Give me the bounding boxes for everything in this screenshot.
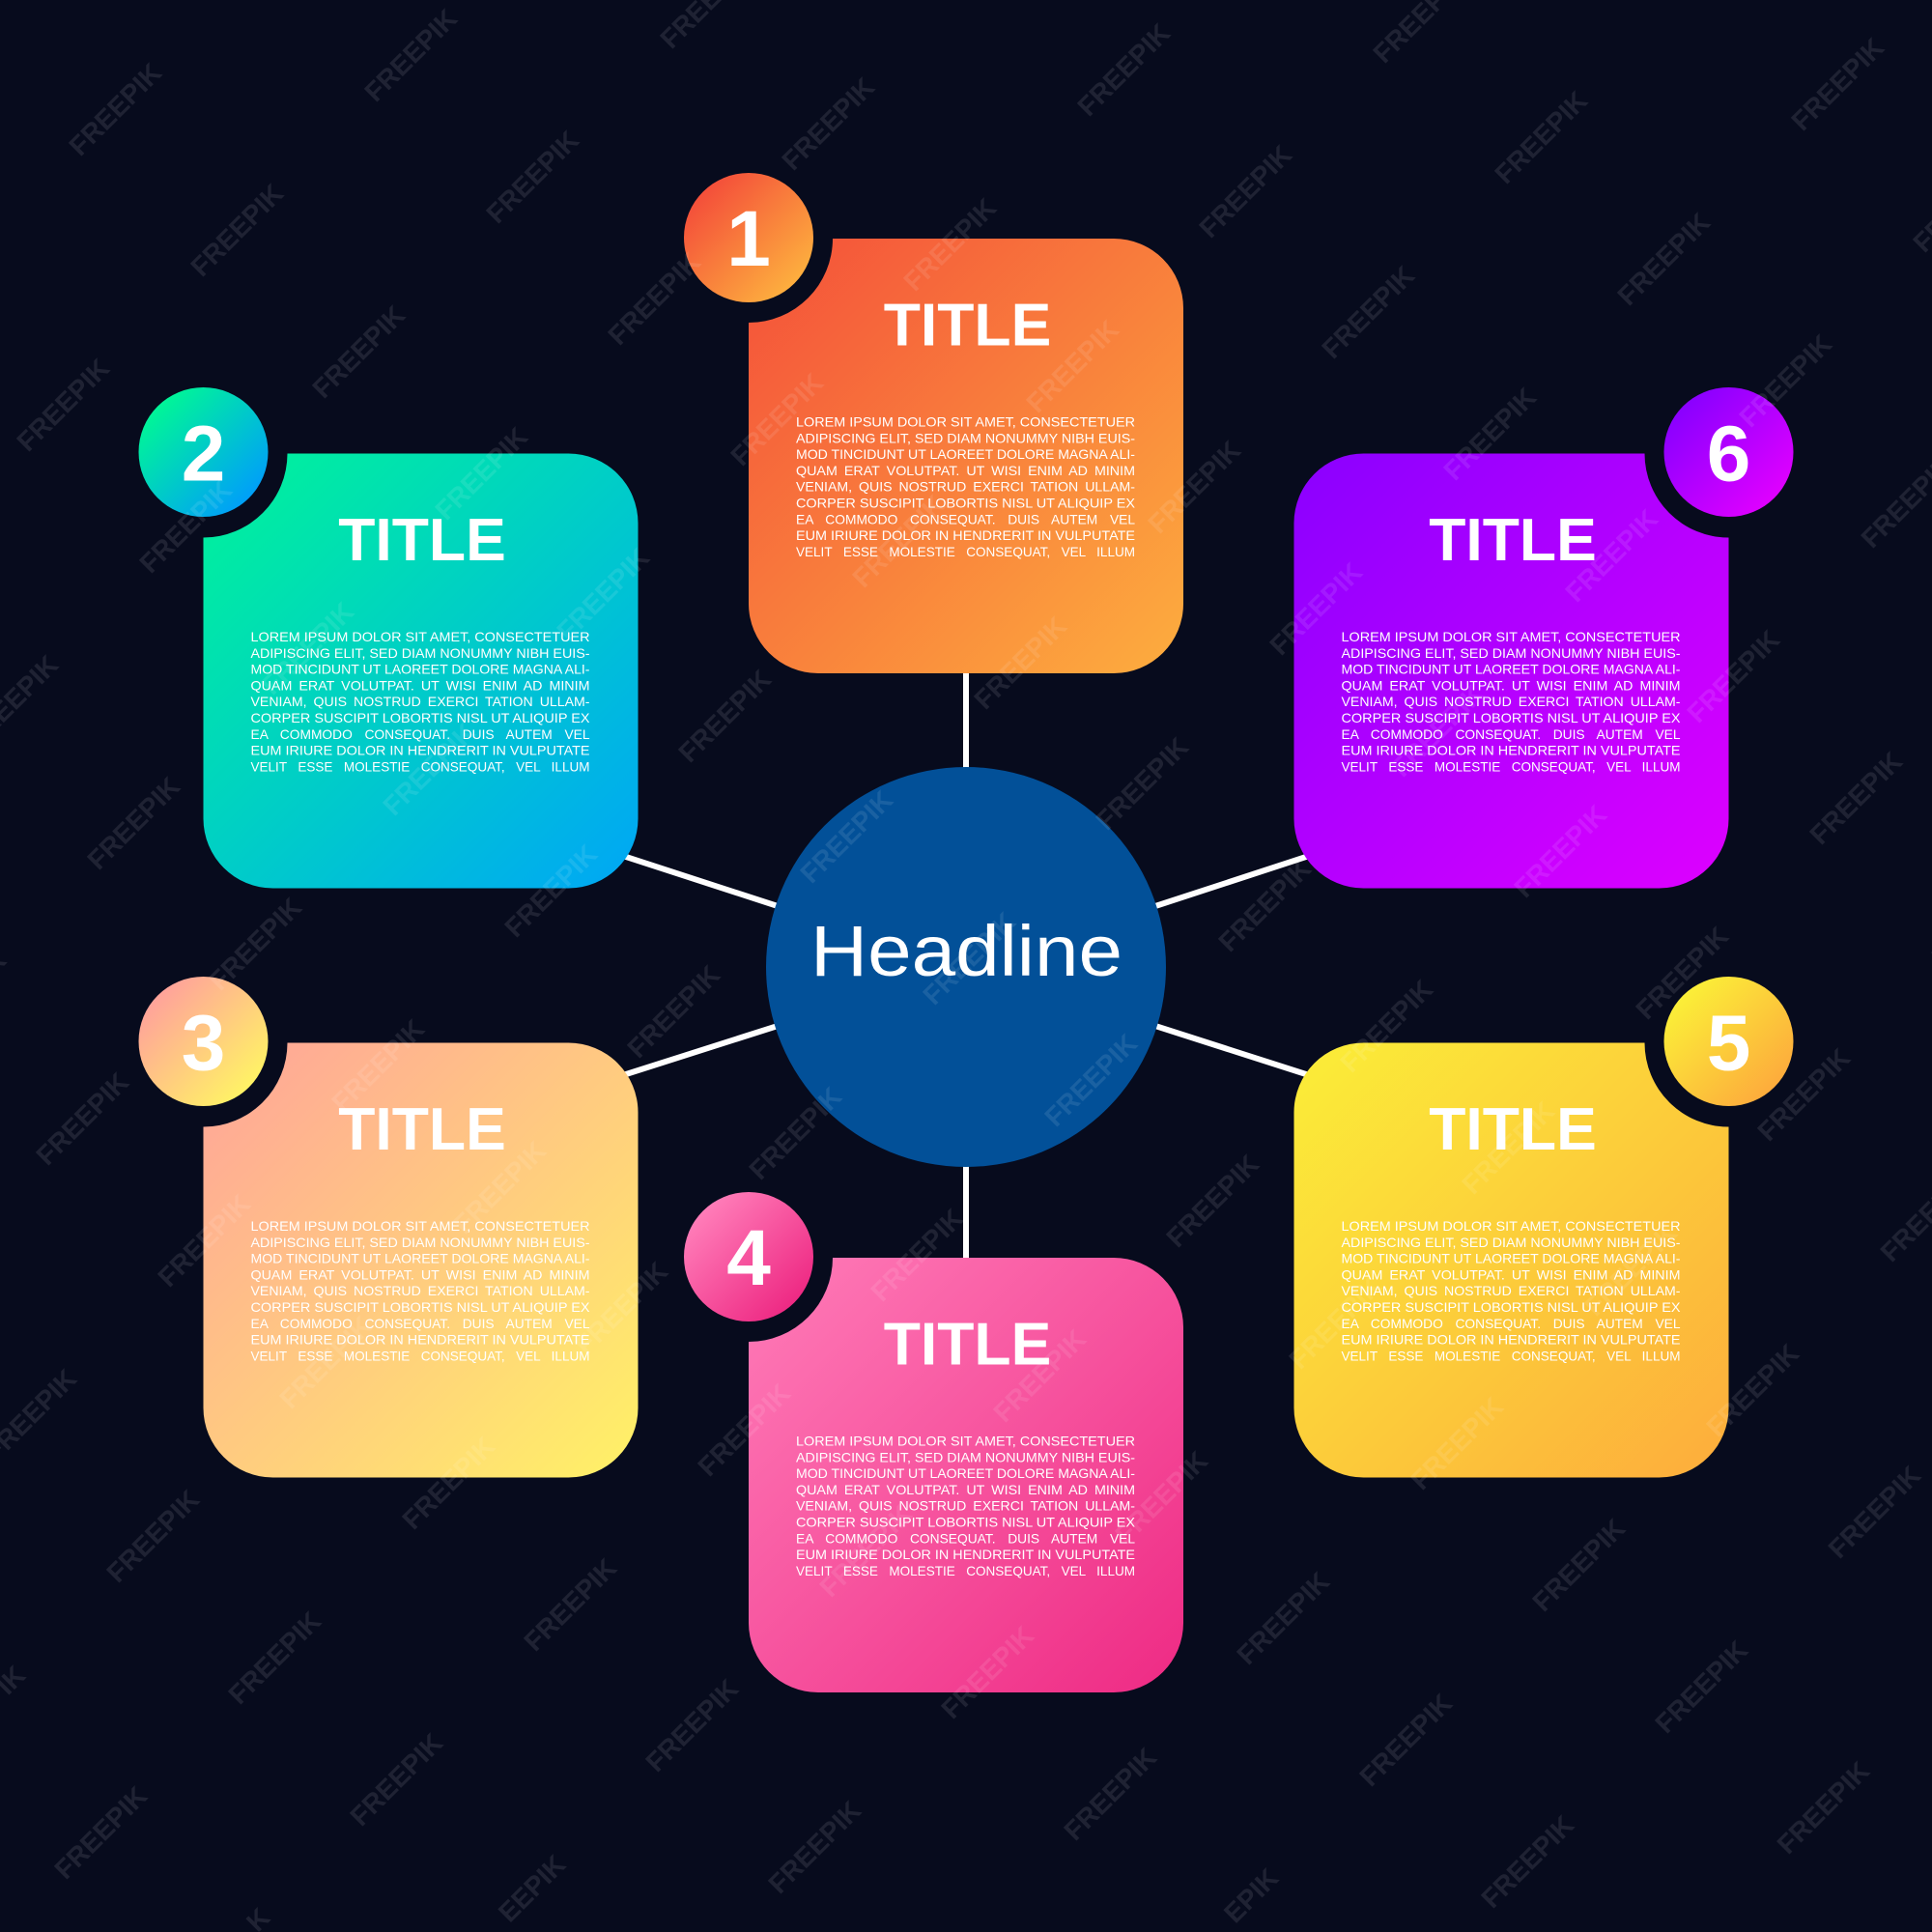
body text: VENIAM, QUIS NOSTRUD EXERCI TATION ULLAM-: [1341, 1283, 1681, 1298]
body text: ADIPISCING ELIT, SED DIAM NONUMMY NIBH EUIS-: [1341, 645, 1681, 661]
watermarks: FREEPIK: [203, 892, 307, 996]
watermarks: FREEPIK: [1559, 503, 1663, 608]
watermarks: FREEPIK: [1611, 207, 1716, 311]
body text: [251, 629, 590, 774]
number badge: [684, 173, 813, 302]
number: 2: [182, 410, 225, 498]
watermarks: FREEPIK: [1771, 1755, 1875, 1860]
panel 6: purple: [1294, 387, 1793, 889]
watermarks: FREEPIK: [1700, 1338, 1804, 1442]
body text: [1341, 629, 1681, 774]
panel 5: yellow: [1294, 977, 1793, 1478]
watermarks: FREEPIK: [358, 3, 463, 107]
watermarks: FREEPIK: [344, 1727, 448, 1832]
body text: VELIT ESSE MOLESTIE CONSEQUAT, VEL ILLUM: [251, 1348, 589, 1363]
body text: VENIAM, QUIS NOSTRUD EXERCI TATION ULLAM-: [796, 479, 1135, 495]
watermarks: FREEPIK: [813, 1498, 918, 1603]
card shape: [749, 1258, 1183, 1692]
watermarks: EPIK: [1218, 1862, 1284, 1928]
body text: QUAM ERAT VOLUTPAT. UT WISI ENIM AD MINIM: [1341, 677, 1681, 693]
watermarks: FREEPIK: [1142, 435, 1246, 539]
watermarks: FREEPIK: [602, 246, 706, 351]
body text: LOREM IPSUM DOLOR SIT AMET, CONSECTETUER: [796, 413, 1135, 429]
watermarks: FREEPIK: [11, 353, 115, 457]
watermarks: FREEPIK: [1385, 678, 1490, 782]
body text: [251, 1218, 590, 1363]
watermarks: FREEPIK: [1071, 17, 1176, 122]
panel 4: pink: [684, 1192, 1183, 1692]
watermarks: FREEPIK: [1489, 85, 1593, 189]
body text: EA COMMODO CONSEQUAT. DUIS AUTEM VEL: [251, 726, 590, 742]
watermarks: FREEPIK: [1264, 556, 1368, 661]
card shape: [1294, 454, 1729, 889]
body text: MOD TINCIDUNT UT LAOREET DOLORE MAGNA ALI-: [1341, 1251, 1681, 1266]
watermarks: FREEPIK: [1160, 1149, 1264, 1253]
body text: MOD TINCIDUNT UT LAOREET DOLORE MAGNA ALI-: [1341, 662, 1681, 677]
body text: LOREM IPSUM DOLOR SIT AMET, CONSECTETUER: [1341, 629, 1681, 644]
watermarks: FREEPIK: [1456, 1095, 1560, 1200]
watermarks: FREEPIK: [30, 1066, 134, 1171]
watermarks: FREEPIK: [133, 474, 238, 579]
body text: VENIAM, QUIS NOSTRUD EXERCI TATION ULLAM-: [251, 1283, 590, 1298]
watermarks: FREEPIK: [1058, 1742, 1162, 1846]
number badge: [139, 977, 269, 1106]
body text: CORPER SUSCIPIT LOBORTIS NISL UT ALIQUIP EX: [1341, 710, 1681, 725]
watermarks: FREEPIK: [100, 1484, 205, 1588]
number badge: [139, 387, 269, 517]
watermarks: FREEPIK: [48, 1780, 153, 1885]
body text: VENIAM, QUIS NOSTRUD EXERCI TATION ULLAM-: [1341, 694, 1681, 709]
card shape: [203, 454, 638, 889]
number badge: [684, 1192, 813, 1321]
watermarks: FREEPIK: [1405, 1391, 1509, 1495]
panel 2: green-blue: [139, 387, 638, 889]
watermarks: FREEPIK: [1109, 1445, 1213, 1549]
watermarks: FREEPIK: [846, 489, 951, 593]
body text: CORPER SUSCIPIT LOBORTIS NISL UT ALIQUIP EX: [796, 495, 1136, 510]
body text: MOD TINCIDUNT UT LAOREET DOLORE MAGNA ALI-: [251, 662, 590, 677]
number: 6: [1707, 410, 1750, 498]
watermarks: FREEPIK: [935, 1620, 1039, 1724]
body text: QUAM ERAT VOLUTPAT. UT WISI ENIM AD MINIM: [796, 463, 1135, 478]
body text: CORPER SUSCIPIT LOBORTIS NISL UT ALIQUIP EX: [796, 1515, 1136, 1530]
body text: ADIPISCING ELIT, SED DIAM NONUMMY NIBH EUIS-: [1341, 1235, 1681, 1250]
central circle with headline: [766, 767, 1166, 1167]
body text: EA COMMODO CONSEQUAT. DUIS AUTEM VEL: [251, 1316, 590, 1331]
watermarks: FREEPIK: [185, 178, 289, 282]
body text: EA COMMODO CONSEQUAT. DUIS AUTEM VEL: [1341, 726, 1681, 742]
watermarks: FREEPIK: [724, 367, 829, 471]
watermarks: FREEPIK: [1526, 1513, 1631, 1617]
body text: EA COMMODO CONSEQUAT. DUIS AUTEM VEL: [796, 1530, 1135, 1546]
body text: VELIT ESSE MOLESTIE CONSEQUAT, VEL ILLUM: [1341, 1348, 1681, 1363]
watermarks: FREEPIK: [968, 611, 1072, 715]
watermarks: FREEPIK: [569, 1256, 673, 1360]
watermarks: FREEPIK: [1475, 1809, 1579, 1914]
number: 5: [1707, 999, 1750, 1088]
watermarks: EEPIK: [493, 1849, 571, 1928]
body text: EUM IRIURE DOLOR IN HENDRERIT IN VULPUTATE: [251, 1332, 590, 1348]
body text: [1341, 1218, 1681, 1363]
watermarks: FREEPIK: [1508, 799, 1612, 903]
watermarks: FREEPIK: [306, 299, 411, 404]
watermarks: FREEPIK: [1649, 1634, 1753, 1739]
connector lines: [623, 671, 1309, 1260]
body text: VELIT ESSE MOLESTIE CONSEQUAT, VEL ILLUM: [796, 1563, 1135, 1578]
watermarks: FREEPIK: [518, 1552, 622, 1657]
title: TITLE: [1429, 1095, 1597, 1163]
body text: LOREM IPSUM DOLOR SIT AMET, CONSECTETUER: [1341, 1218, 1681, 1234]
watermarks: FREEPIK: [498, 838, 603, 943]
body text: VELIT ESSE MOLESTIE CONSEQUAT, VEL ILLUM: [796, 544, 1135, 559]
number: 4: [726, 1214, 771, 1302]
body text: LOREM IPSUM DOLOR SIT AMET, CONSECTETUER: [251, 629, 590, 644]
watermarks: FREEPIK: [63, 57, 167, 161]
watermarks: FREEPIK: [152, 1188, 256, 1293]
watermarks: FREEPIK: [326, 1013, 430, 1118]
watermarks: FREEPIK: [762, 1795, 867, 1899]
watermarks: FREEPIK: [81, 771, 185, 875]
body text: VELIT ESSE MOLESTIE CONSEQUAT, VEL ILLUM: [1341, 758, 1681, 774]
card shape: [1294, 1043, 1729, 1478]
watermarks: FREEPIK: [1334, 974, 1438, 1078]
watermarks: FREEPIK: [1733, 328, 1837, 433]
watermarks: FREEPIK: [1578, 1217, 1683, 1321]
body text: VELIT ESSE MOLESTIE CONSEQUAT, VEL ILLUM: [251, 758, 589, 774]
body text: EUM IRIURE DOLOR IN HENDRERIT IN VULPUTATE: [1341, 1332, 1681, 1348]
body text: EUM IRIURE DOLOR IN HENDRERIT IN VULPUTATE: [1341, 743, 1681, 758]
watermarks: FREEPIK: [1316, 260, 1420, 364]
body text: QUAM ERAT VOLUTPAT. UT WISI ENIM AD MINIM: [251, 677, 589, 693]
number: 1: [726, 195, 771, 283]
watermarks: FREEPIK: [1283, 1270, 1387, 1375]
watermarks: FREEPIK: [273, 1310, 378, 1414]
watermarks: FREEPIK: [865, 1203, 969, 1307]
watermarks: FREEPIK: [743, 1081, 847, 1185]
body text: ADIPISCING ELIT, SED DIAM NONUMMY NIBH EUIS-: [796, 1449, 1135, 1464]
watermarks: FREEPIK: [480, 125, 584, 229]
body text: MOD TINCIDUNT UT LAOREET DOLORE MAGNA ALI-: [796, 446, 1135, 462]
body text: ADIPISCING ELIT, SED DIAM NONUMMY NIBH EUIS-: [796, 430, 1135, 445]
body text: QUAM ERAT VOLUTPAT. UT WISI ENIM AD MINIM: [251, 1266, 589, 1282]
watermarks: FREEPIK: [429, 421, 533, 526]
watermarks: FREEPIK: [551, 542, 655, 646]
body text: EA COMMODO CONSEQUAT. DUIS AUTEM VEL: [796, 511, 1135, 526]
body text: MOD TINCIDUNT UT LAOREET DOLORE MAGNA ALI-: [796, 1465, 1135, 1481]
watermarks: FREEPIK: [1822, 1460, 1926, 1564]
watermarks: FREEPIK: [1630, 921, 1734, 1025]
body text: VENIAM, QUIS NOSTRUD EXERCI TATION ULLAM-: [251, 694, 590, 709]
body text: EUM IRIURE DOLOR IN HENDRERIT IN VULPUTATE: [796, 1547, 1135, 1562]
watermarks: FREEPIK: [1020, 314, 1124, 418]
watermarks: FREEPIK: [1231, 1566, 1335, 1670]
watermarks: FREEPIK: [917, 906, 1021, 1010]
body text: EA COMMODO CONSEQUAT. DUIS AUTEM VEL: [1341, 1316, 1681, 1331]
body text: LOREM IPSUM DOLOR SIT AMET, CONSECTETUER: [251, 1218, 590, 1234]
panel 1: orange: [684, 173, 1183, 673]
body text: EUM IRIURE DOLOR IN HENDRERIT IN VULPUTATE: [251, 743, 590, 758]
watermarks: FREEPIK: [222, 1605, 327, 1710]
watermarks: FREEPIK: [447, 1135, 552, 1239]
body text: ADIPISCING ELIT, SED DIAM NONUMMY NIBH EUIS-: [251, 1235, 590, 1250]
watermarks: FREEPIK: [987, 1323, 1092, 1428]
number: 3: [182, 999, 225, 1088]
panel 3: peach-yellow: [139, 977, 638, 1478]
watermarks: FREEPIK: [1353, 1688, 1458, 1792]
watermarks: FREEPIK: [1804, 746, 1908, 850]
watermarks: FREEPIK: [1090, 731, 1194, 836]
title: TITLE: [338, 506, 506, 574]
title: TITLE: [884, 1310, 1051, 1378]
watermarks: FREEPIK: [396, 1431, 500, 1535]
body text: QUAM ERAT VOLUTPAT. UT WISI ENIM AD MINIM: [1341, 1266, 1681, 1282]
watermarks: FREEPIK: [1785, 32, 1889, 136]
watermarks: FREEPIK: [897, 192, 1002, 297]
body text: CORPER SUSCIPIT LOBORTIS NISL UT ALIQUIP EX: [251, 1299, 590, 1315]
card shape: [203, 1043, 638, 1478]
number badge: [1663, 387, 1793, 517]
watermarks: FREEPIK: [1038, 1028, 1143, 1132]
headline: Headline: [810, 911, 1122, 991]
title: TITLE: [338, 1095, 506, 1163]
body text: MOD TINCIDUNT UT LAOREET DOLORE MAGNA ALI-: [251, 1251, 590, 1266]
watermarks: FREEPIK: [794, 784, 898, 889]
watermarks: FREEPIK: [1193, 139, 1297, 243]
title: TITLE: [1429, 506, 1597, 574]
body text: LOREM IPSUM DOLOR SIT AMET, CONSECTETUER: [796, 1434, 1135, 1449]
body text: VENIAM, QUIS NOSTRUD EXERCI TATION ULLAM-: [796, 1498, 1135, 1514]
watermarks: FREEPIK: [639, 1673, 744, 1777]
body text: QUAM ERAT VOLUTPAT. UT WISI ENIM AD MINIM: [796, 1482, 1135, 1497]
watermarks: FREEPIK: [1437, 382, 1542, 486]
watermarks: FREEPIK: [377, 717, 481, 821]
body text: [796, 413, 1136, 559]
watermarks: FREEPIK: [1681, 624, 1785, 728]
body text: [796, 1434, 1136, 1578]
watermarks: FREEPIK: [255, 596, 359, 700]
watermarks: FREEPIK: [1751, 1042, 1856, 1147]
body text: CORPER SUSCIPIT LOBORTIS NISL UT ALIQUIP EX: [1341, 1299, 1681, 1315]
watermarks: FREEPIK: [692, 1378, 796, 1482]
watermarks: FREEPIK: [776, 71, 880, 176]
body text: EUM IRIURE DOLOR IN HENDRERIT IN VULPUTATE: [796, 527, 1135, 543]
watermarks: FREEPIK: [621, 959, 725, 1064]
title: TITLE: [884, 292, 1051, 359]
number badge: [1663, 977, 1793, 1106]
watermarks: FREEPIK: [1212, 853, 1317, 957]
card shape: [749, 239, 1183, 673]
body text: ADIPISCING ELIT, SED DIAM NONUMMY NIBH EUIS-: [251, 645, 590, 661]
body text: CORPER SUSCIPIT LOBORTIS NISL UT ALIQUIP EX: [251, 710, 590, 725]
watermarks: FREEPIK: [672, 664, 777, 768]
